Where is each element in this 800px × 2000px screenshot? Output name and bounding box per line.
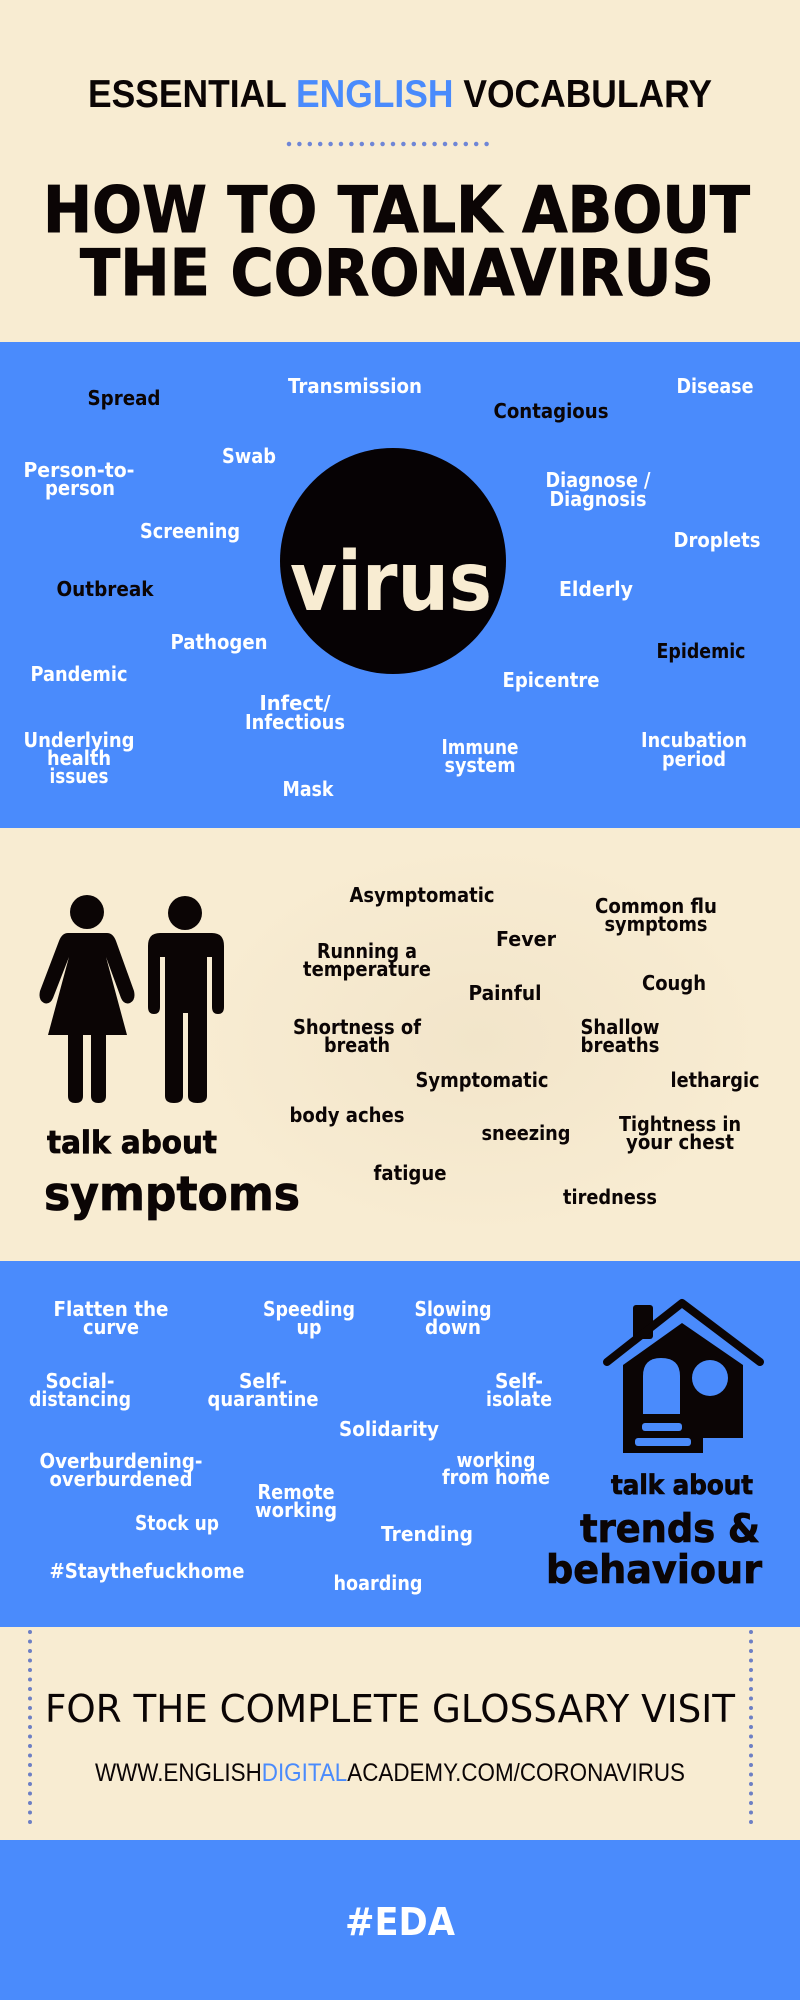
- term: Infect/Infectious: [245, 691, 345, 734]
- heading: trends and behaviour: [546, 1507, 763, 1593]
- heading: talk about: talk about: [611, 1470, 753, 1501]
- term: Self-quarantine: quarantine: [208, 1387, 318, 1411]
- panel: symptoms: [0, 828, 800, 1261]
- black circle with word virus: virus: [290, 535, 492, 630]
- term: Painful: Painful: [468, 981, 542, 1005]
- panel: trends and behaviour: [0, 1261, 800, 1627]
- term: Running a temperature: [303, 939, 431, 981]
- term: Person-to-person: Person-to-: [24, 458, 134, 482]
- term: Incubation period: period: [662, 747, 726, 771]
- term: Flatten the curve: curve: [83, 1315, 139, 1339]
- term: Remote working: working: [255, 1498, 337, 1522]
- term: Contagious: Contagious: [494, 399, 608, 423]
- term: Flatten the curve: [54, 1297, 168, 1339]
- term: Stock up: Stock up: [135, 1511, 219, 1535]
- term: Incubation period: Incubation: [641, 728, 747, 752]
- term: Flatten the curve: Flatten the: [54, 1297, 168, 1321]
- term: Solidarity: Solidarity: [339, 1417, 439, 1441]
- term: Self-quarantine: [208, 1369, 318, 1411]
- panel: virus vocabulary: [0, 342, 800, 828]
- term: Underlying health issues: Underlying: [24, 728, 134, 752]
- term: Speeding up: up: [296, 1315, 322, 1339]
- term: Incubation period: [641, 728, 747, 771]
- term: Social-distancing: [29, 1369, 131, 1411]
- term: Slowing down: Slowing: [414, 1297, 492, 1321]
- term: Running a temperature: Running a: [317, 939, 417, 963]
- heading: talk about: talk about: [47, 1125, 217, 1161]
- term: Overburdening-overburdened: Overburdening-: [40, 1449, 202, 1473]
- term: Disease: Disease: [676, 374, 754, 398]
- term: lethargic: lethargic: [670, 1068, 760, 1092]
- dotted side rule left: [28, 1632, 32, 1830]
- term: working from home: [442, 1448, 550, 1489]
- term: Diagnose / Diagnosis: Diagnose /: [546, 468, 651, 492]
- glossary heading: FOR THE COMPLETE GLOSSARY VISIT: [45, 1687, 736, 1731]
- term: Overburdening-overburdened: overburdened: [50, 1467, 192, 1491]
- term: Asymptomatic: Asymptomatic: [350, 883, 494, 907]
- term: Tightness in your chest: your chest: [626, 1130, 734, 1154]
- main title: HOW TO TALK ABOUT: [43, 174, 750, 248]
- term: Epicentre: Epicentre: [502, 668, 600, 692]
- main title: THE CORONAVIRUS: [80, 237, 714, 311]
- term: Slowing down: down: [425, 1315, 481, 1339]
- term: Person-to-person: person: [45, 476, 115, 500]
- hashtag: #EDA: [345, 1900, 456, 1944]
- icon: house: [607, 1303, 760, 1453]
- term: Overburdening-overburdened: [40, 1449, 202, 1491]
- term: Tightness in your chest: [619, 1112, 741, 1154]
- panel: header: [0, 0, 800, 342]
- term: Pandemic: Pandemic: [30, 662, 128, 686]
- term: working from home: working: [456, 1448, 536, 1472]
- term: Speeding up: Speeding: [263, 1297, 355, 1321]
- term: Remote working: [255, 1480, 337, 1522]
- term: Shallow breaths: Shallow: [580, 1015, 660, 1039]
- term: working from home: from home: [442, 1465, 550, 1489]
- term: Immune system: Immune: [442, 735, 518, 759]
- term: Screening: Screening: [140, 519, 240, 543]
- term: Swab: Swab: [222, 444, 276, 468]
- term: Shallow breaths: [580, 1015, 660, 1057]
- term: Pathogen: Pathogen: [170, 630, 268, 654]
- heading: trends and behaviour: behaviour: [546, 1548, 763, 1593]
- term: Epidemic: Epidemic: [656, 639, 746, 663]
- term: Shallow breaths: breaths: [580, 1033, 660, 1057]
- term: sneezing: sneezing: [482, 1121, 570, 1145]
- term: Fever: Fever: [496, 927, 556, 951]
- term: Tightness in your chest: Tightness in: [619, 1112, 741, 1136]
- term: Trending: Trending: [381, 1522, 473, 1546]
- term: Social-distancing: Social-: [46, 1369, 114, 1393]
- term: Immune system: system: [444, 753, 516, 777]
- term: Common flu symptoms: Common flu: [595, 894, 717, 918]
- term: Social-distancing: distancing: [29, 1387, 131, 1411]
- term: Common flu symptoms: symptoms: [604, 912, 708, 936]
- term: Underlying health issues: health: [47, 746, 111, 770]
- term: Person-to-person: [24, 458, 134, 500]
- main title: [43, 174, 750, 311]
- term: Infect/Infectious: Infectious: [245, 710, 345, 734]
- term: Symptomatic: Symptomatic: [416, 1068, 548, 1092]
- term: Slowing down: [414, 1297, 492, 1339]
- heading: trends and behaviour: trends &: [580, 1507, 760, 1552]
- dotted side rule right: [749, 1632, 753, 1830]
- term: Outbreak: Outbreak: [56, 577, 154, 601]
- term: Underlying health issues: issues: [50, 764, 108, 788]
- kicker heading: ESSENTIAL ENGLISH VOCABULARY: [88, 73, 712, 116]
- term: Droplets: Droplets: [674, 528, 760, 552]
- icon: woman figure: [40, 895, 134, 1103]
- glossary url: WWW.ENGLISHDIGITALACADEMY.COM/CORONAVIRUS: [95, 1759, 685, 1787]
- term: Self-quarantine: Self-: [239, 1369, 287, 1393]
- term: body aches: body aches: [290, 1103, 404, 1127]
- term: Shortness of breath: breath: [324, 1033, 390, 1057]
- term: tiredness: tiredness: [563, 1185, 657, 1209]
- term: Transmission: Transmission: [288, 374, 422, 398]
- term: Self-isolate: Self-: [495, 1369, 543, 1393]
- term: fatigue: fatigue: [374, 1161, 446, 1185]
- term: Common flu symptoms: [595, 894, 717, 936]
- term: Underlying health issues: [24, 728, 134, 788]
- term: Cough: Cough: [642, 971, 706, 995]
- term: #Staythefuckhome: #Staythefuckhome: [50, 1559, 244, 1583]
- term: hoarding: hoarding: [334, 1571, 422, 1595]
- term: Self-isolate: isolate: [486, 1387, 552, 1411]
- term: Immune system: [442, 735, 518, 777]
- term: Shortness of breath: Shortness of: [293, 1015, 421, 1039]
- term: Spread: Spread: [88, 386, 160, 410]
- dotted divider: [289, 142, 487, 146]
- term: Infect/Infectious: Infect/: [260, 691, 331, 715]
- term: Remote working: Remote: [258, 1480, 334, 1504]
- term: Diagnose / Diagnosis: Diagnosis: [550, 487, 646, 511]
- term: Self-isolate: [486, 1369, 552, 1411]
- panel: footer: [0, 1840, 800, 2000]
- term: Mask: Mask: [282, 777, 334, 801]
- icon: man figure: [148, 896, 224, 1103]
- term: Elderly: Elderly: [559, 577, 633, 601]
- term: Diagnose / Diagnosis: [546, 468, 651, 511]
- term: Running a temperature: temperature: [303, 957, 431, 981]
- term: Shortness of breath: [293, 1015, 421, 1057]
- term: Speeding up: [263, 1297, 355, 1339]
- panel: glossary call to action: [0, 1627, 800, 1840]
- heading: symptoms: symptoms: [44, 1167, 300, 1222]
- black circle with word virus: [280, 448, 506, 674]
